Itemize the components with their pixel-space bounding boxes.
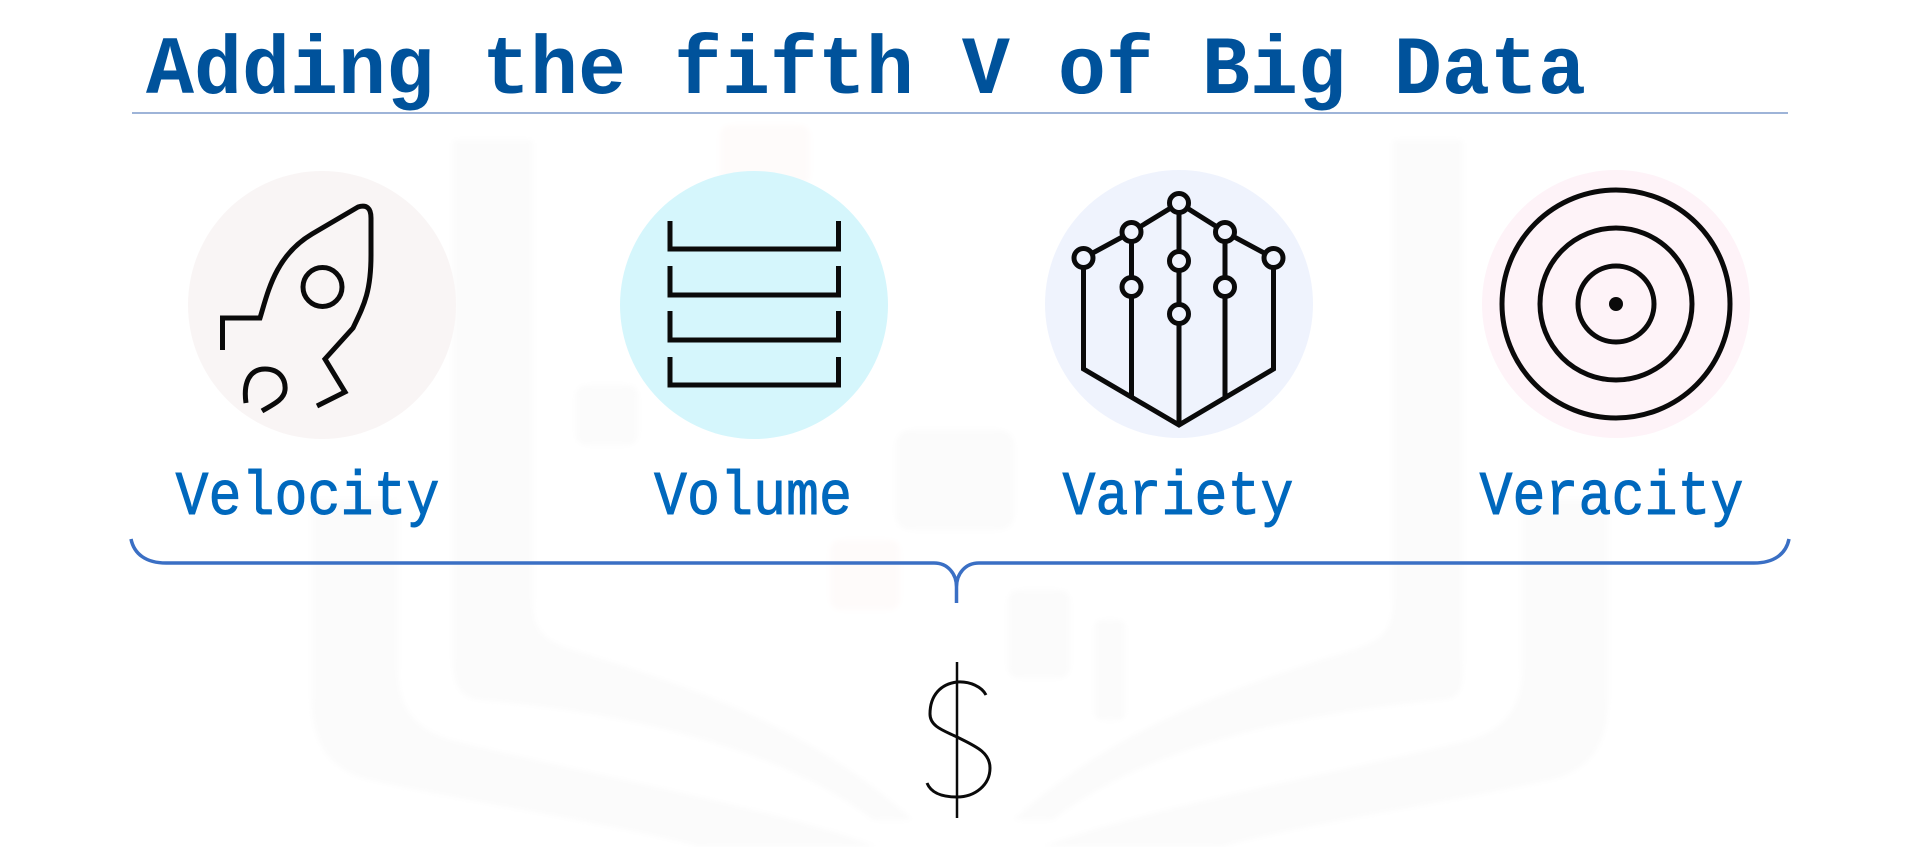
- brace grouping the four Vs: [131, 539, 1789, 603]
- variety circle: [1045, 170, 1313, 438]
- icon: stacked trays: [670, 221, 838, 385]
- panel: volume: [620, 171, 888, 533]
- title: Adding the fifth V of Big Data: [146, 25, 1586, 118]
- panel: velocity: [176, 171, 456, 533]
- icon: branching network: [1074, 194, 1283, 425]
- volume circle: [620, 171, 888, 439]
- title rule: [132, 112, 1788, 114]
- icon: target: [1502, 190, 1730, 418]
- icon: dollar sign (value): [927, 662, 990, 818]
- label: variety: Variety: [1063, 462, 1293, 533]
- label: volume: Volume: [654, 462, 852, 533]
- panel: variety: [1045, 170, 1313, 533]
- label: veracity: Veracity: [1480, 462, 1743, 533]
- icon: rocket: [222, 206, 371, 411]
- background watermark: faint book and network: [312, 125, 1608, 847]
- veracity circle: [1482, 170, 1750, 438]
- label: velocity: Velocity: [176, 462, 439, 533]
- velocity circle: [188, 171, 456, 439]
- panel: veracity: [1480, 170, 1750, 533]
